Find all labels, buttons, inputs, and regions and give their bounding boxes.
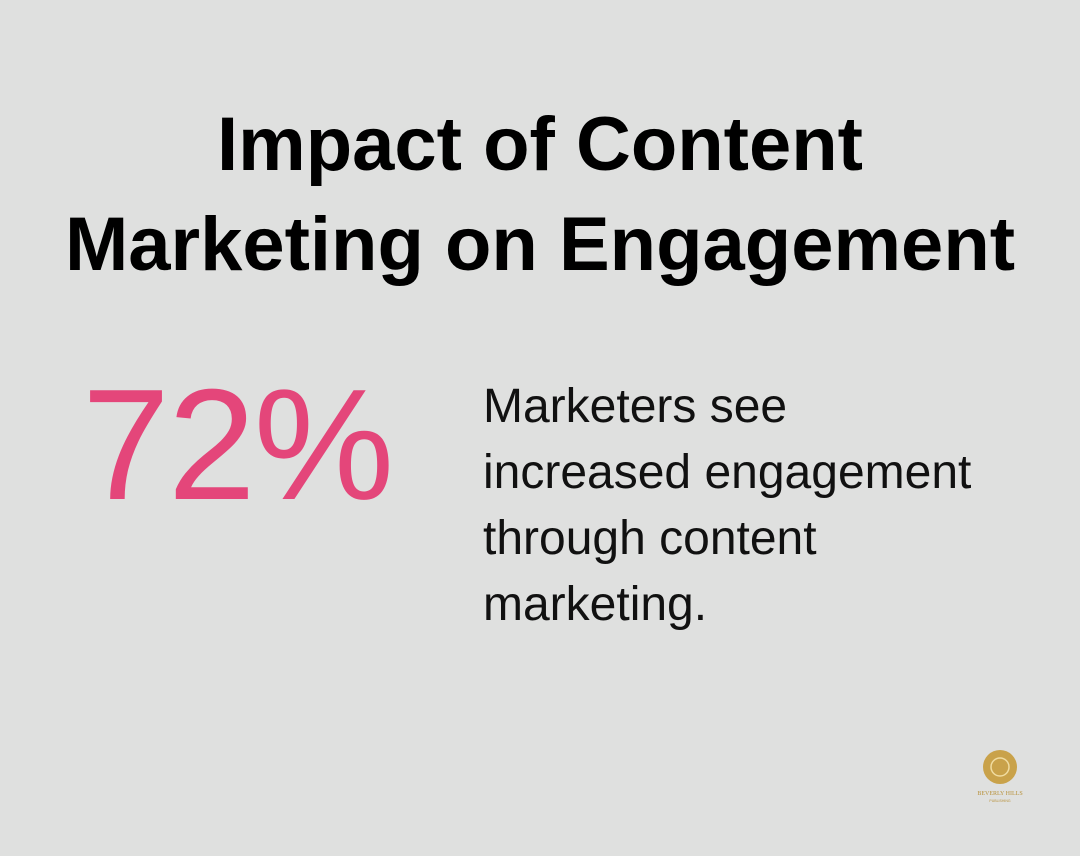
stat description — [483, 380, 971, 631]
stat description: through content — [483, 512, 817, 565]
stat number: 72% — [82, 357, 392, 533]
stat description: increased engagement — [483, 446, 971, 499]
stat description: marketing. — [483, 578, 707, 631]
logo: BEVERLY HILLS — [977, 791, 1023, 797]
title: Marketing on Engagement — [65, 202, 1015, 287]
stat description: Marketers see — [483, 380, 787, 433]
title: Impact of Content — [217, 102, 863, 187]
title — [65, 102, 1015, 287]
logo — [977, 750, 1023, 803]
logo: PUBLISHING — [989, 799, 1011, 803]
